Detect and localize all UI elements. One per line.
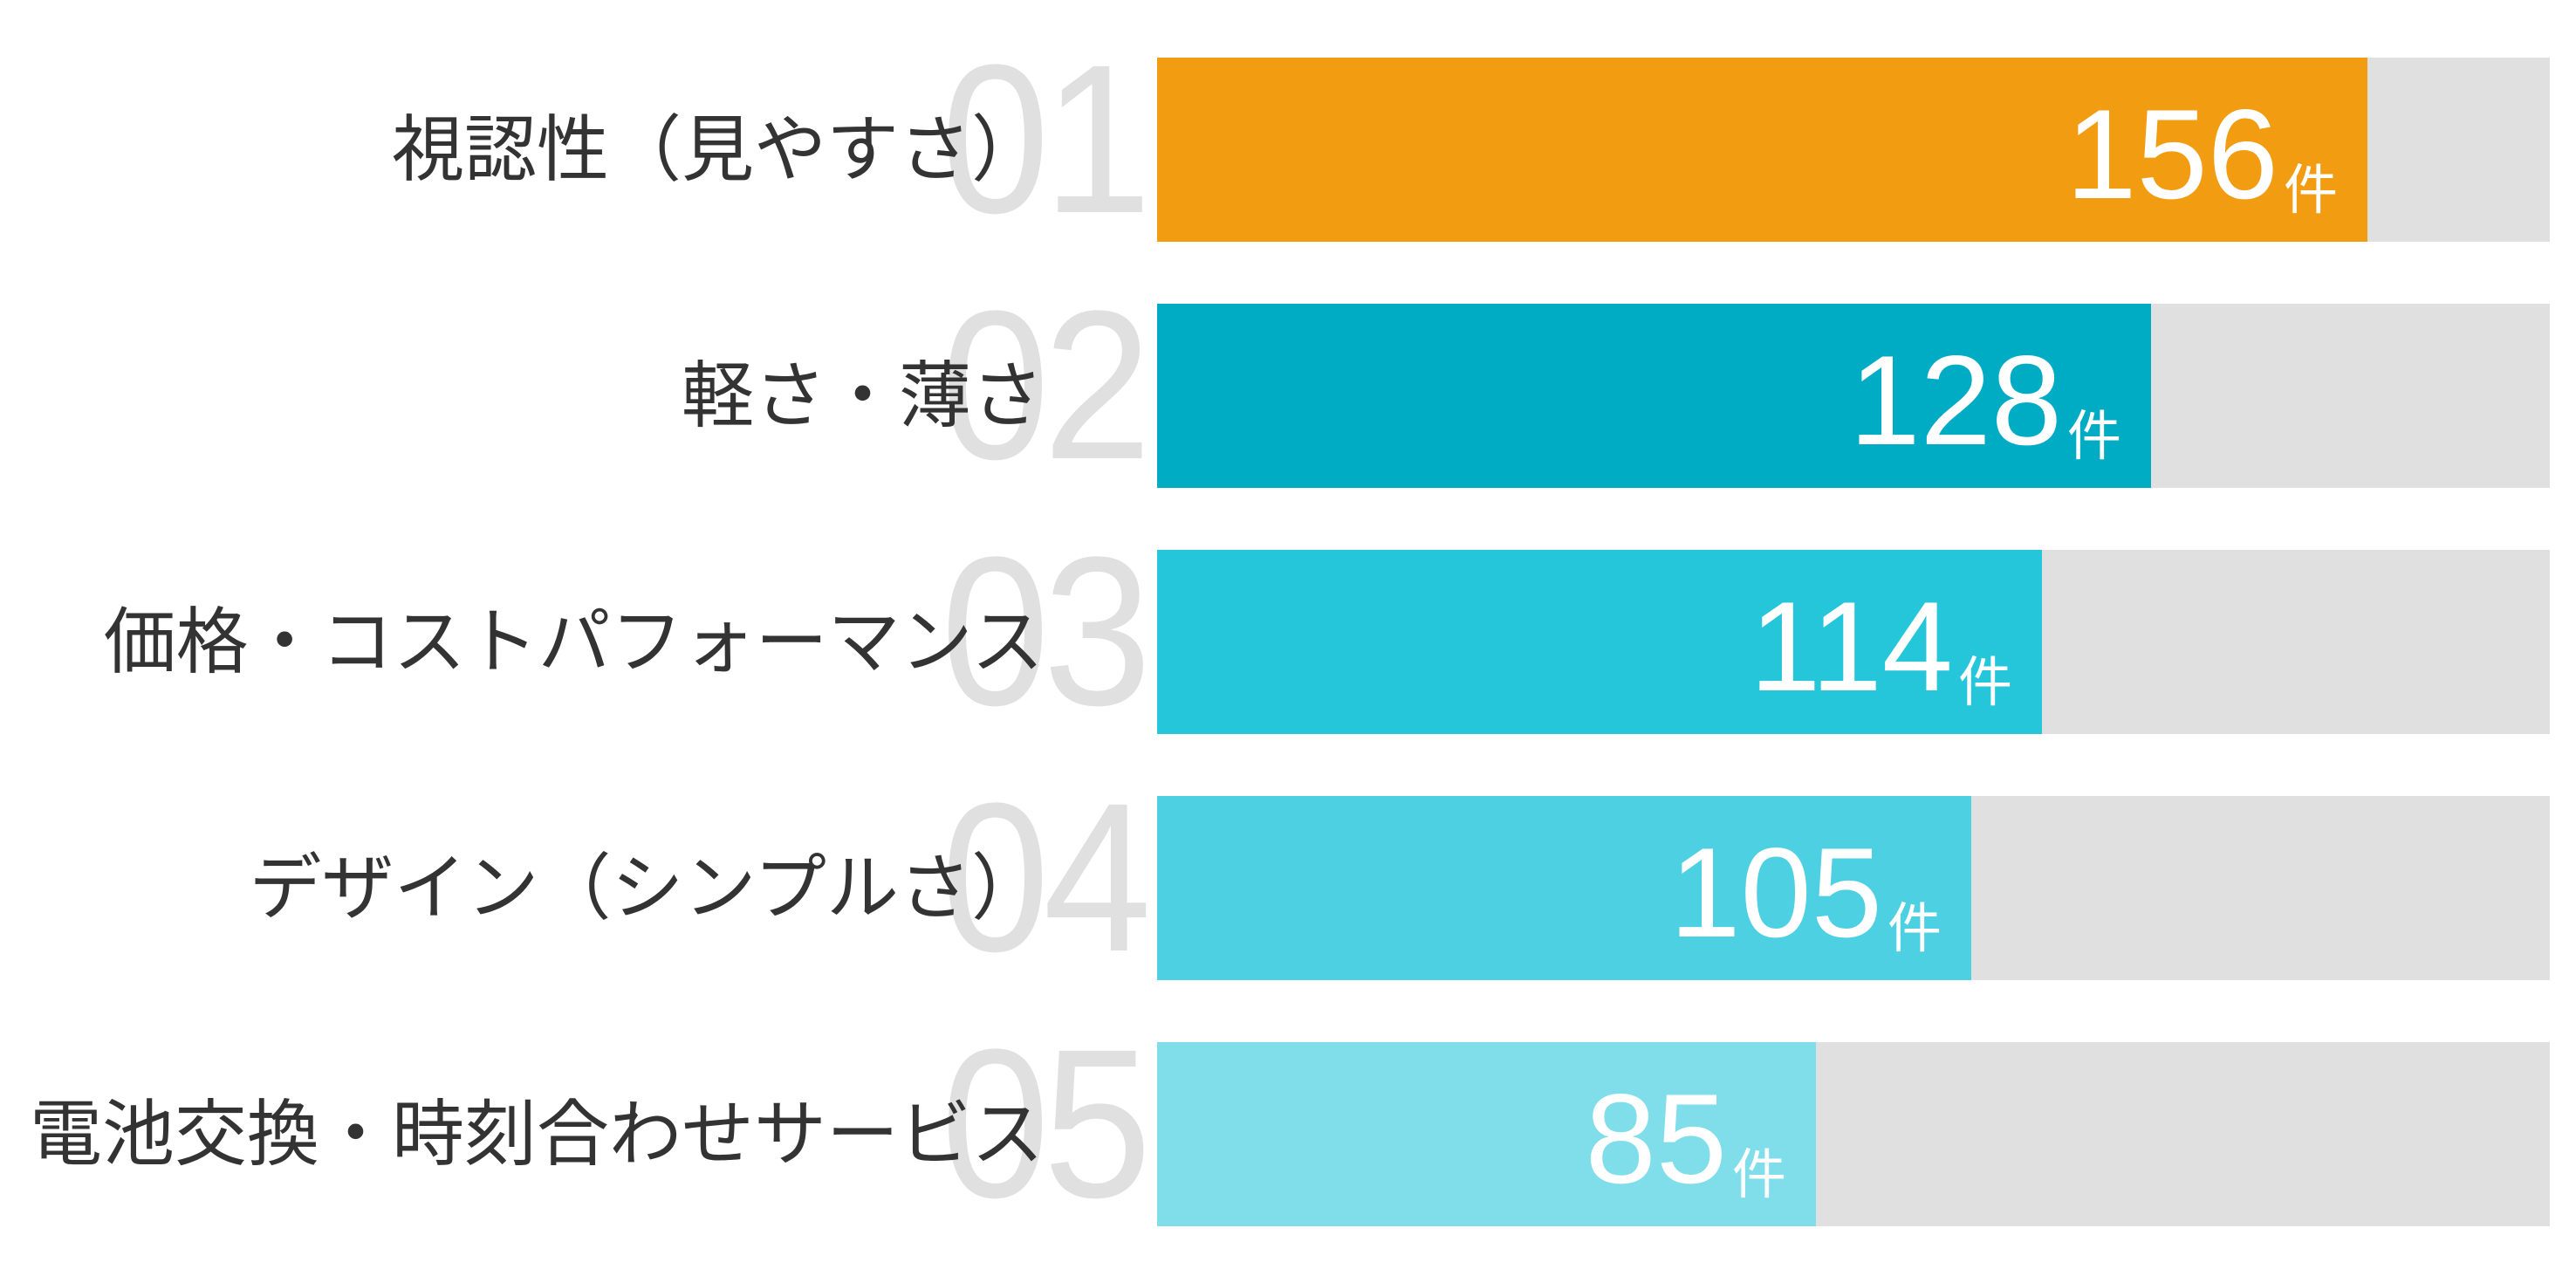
label 4: デザイン（シンプルさ） [249,847,1044,929]
label 2: 軽さ・薄さ [682,355,1044,436]
rank number 05: 05 [941,1005,1145,1242]
label 5: 電池交換・時刻合わせサービス [30,1094,1044,1175]
bar 3: 件 [1958,638,2012,717]
bar 4: 件 [1887,884,1942,963]
rank number 04: 04 [941,759,1145,996]
label 3: 価格・コストパフォーマンス [104,601,1044,683]
rank number 03: 03 [941,513,1145,750]
bar 4 [1157,796,2550,980]
rank number 02: 02 [941,267,1145,504]
row 1 [392,21,2550,257]
bar 5: 85 [1586,1067,1727,1210]
row 3 [104,513,2550,750]
bar 4: 105 [1669,821,1882,964]
bar 2 [1157,304,2550,488]
label 1: 視認性（見やすさ） [392,109,1044,190]
row 2 [682,267,2550,504]
bar 3 [1157,550,2550,734]
bar 5 [1157,1042,2550,1226]
bar 2: 128 [1849,329,2062,471]
rank number 01: 01 [941,21,1145,257]
bar 1: 156 [2066,83,2278,225]
bar 5: 件 [1732,1130,1786,1209]
bar 3: 114 [1750,575,1953,717]
bar 1: 件 [2284,146,2338,224]
row 4 [249,759,2550,996]
row 5 [30,1005,2550,1242]
bar 2: 件 [2067,392,2121,470]
bar 1 [1157,58,2550,242]
